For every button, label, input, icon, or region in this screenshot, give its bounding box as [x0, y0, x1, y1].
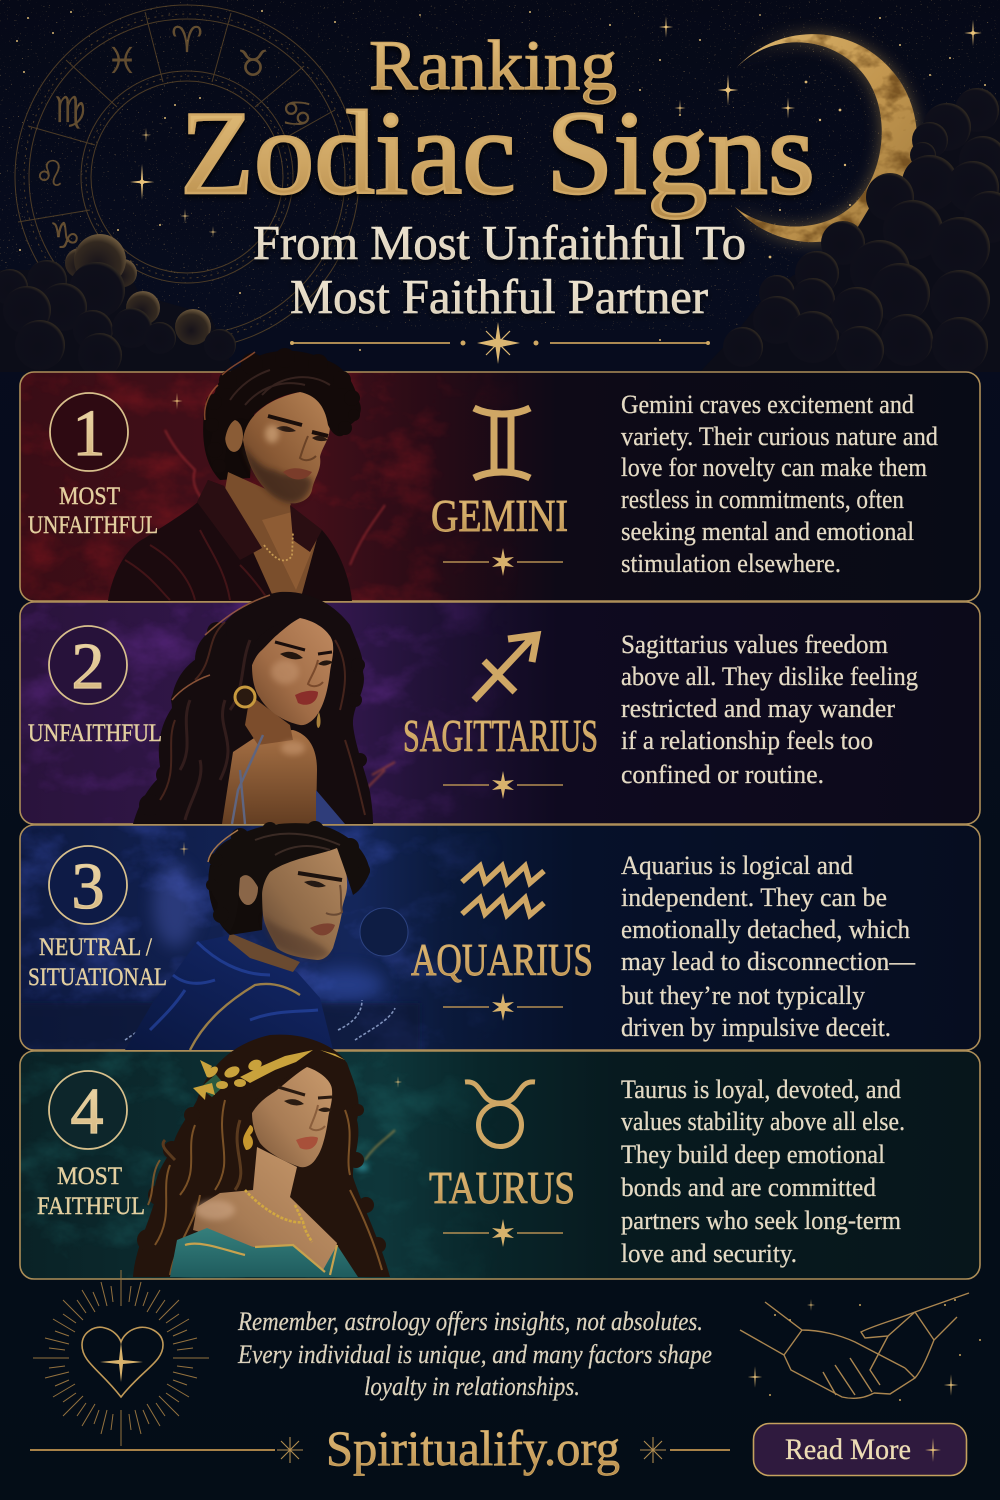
- description: seeking mental and emotional: [621, 517, 914, 546]
- description: Aquarius is logical and: [621, 851, 853, 880]
- description: [621, 851, 916, 1042]
- closing note: [237, 1307, 712, 1401]
- rank badge: 3: [72, 850, 104, 923]
- description: confined or routine.: [621, 760, 824, 789]
- nebula: [20, 602, 489, 823]
- description: Gemini craves excitement and: [621, 390, 914, 419]
- closing note: loyalty in relationships.: [364, 1372, 580, 1401]
- rank badge: [49, 1071, 127, 1149]
- sign name: SAGITTARIUS: [403, 711, 598, 761]
- title: Ranking: [369, 27, 617, 105]
- description: love for novelty can make them: [621, 453, 927, 482]
- description: They build deep emotional: [621, 1140, 885, 1169]
- title: [180, 27, 815, 324]
- description: emotionally detached, which: [621, 915, 910, 944]
- description: Taurus is loyal, devoted, and: [621, 1075, 901, 1104]
- rank label: MOST: [57, 1163, 122, 1190]
- portrait: woman with long dark hair: [133, 592, 373, 824]
- sign name: TAURUS: [429, 1163, 575, 1213]
- closing note: Every individual is unique, and many factors shape: [237, 1340, 712, 1369]
- read more button: [754, 1424, 966, 1476]
- title: Most Faithful Partner: [290, 269, 708, 324]
- starfield: [0, 0, 1000, 351]
- star divider: [443, 548, 563, 576]
- clouds left: [0, 234, 236, 377]
- portrait: man in blue cloak: [125, 821, 370, 1050]
- description: values stability above all else.: [621, 1107, 905, 1136]
- title divider: [290, 322, 710, 364]
- card border: [20, 1051, 980, 1279]
- icon: sagittarius: [474, 635, 537, 700]
- website footer: [30, 1420, 730, 1476]
- card background: [20, 1051, 980, 1279]
- rank label: FAITHFUL: [37, 1193, 145, 1220]
- description: restless in commitments, often: [621, 485, 904, 514]
- portrait: man in dark shirt: [108, 348, 361, 601]
- star divider: [443, 771, 563, 799]
- description: [621, 1075, 905, 1268]
- description: love and security.: [621, 1239, 797, 1268]
- rank badge: 4: [70, 1075, 104, 1148]
- rank badge: 2: [72, 630, 104, 703]
- card border: [20, 825, 980, 1050]
- sign name: AQUARIUS: [411, 935, 593, 985]
- icon: gemini: [474, 408, 530, 478]
- card background: [20, 372, 980, 601]
- zodiac wheel: ♓: [106, 41, 138, 82]
- nebula and sea: [20, 826, 480, 1050]
- description: may lead to disconnection—: [621, 947, 916, 976]
- zodiac wheel: ♉: [237, 44, 269, 85]
- panel: taurus: [20, 1035, 980, 1279]
- description: Sagittarius values freedom: [621, 630, 888, 659]
- zodiac wheel: [15, 5, 359, 349]
- portrait: woman with golden crown: [133, 1035, 390, 1277]
- star divider: [443, 1219, 563, 1247]
- star divider: [443, 993, 563, 1021]
- rank label: UNFAITHFUL: [28, 512, 158, 539]
- read more button: Read More: [785, 1433, 911, 1466]
- icon: taurus: [465, 1082, 535, 1146]
- description: independent. They can be: [621, 883, 887, 912]
- nebula: [20, 1052, 468, 1278]
- zodiac wheel: ♌: [34, 154, 66, 195]
- description: partners who seek long-term: [621, 1206, 901, 1235]
- description: [621, 630, 918, 789]
- rank label: SITUATIONAL: [28, 964, 167, 991]
- rank label: MOST: [59, 483, 120, 510]
- description: driven by impulsive deceit.: [621, 1013, 891, 1042]
- rank label: NEUTRAL /: [39, 934, 152, 961]
- description: stimulation elsewhere.: [621, 549, 841, 578]
- panel: sagittarius: [20, 592, 980, 824]
- card border: [20, 372, 980, 601]
- icon: clasped hands: [740, 1293, 981, 1401]
- sign name: GEMINI: [431, 491, 568, 541]
- rank label: UNFAITHFUL: [28, 720, 162, 747]
- panel: gemini: [20, 348, 980, 601]
- crescent moon: [730, 30, 925, 245]
- rank badge: [49, 846, 127, 924]
- icon: heart with rays: [33, 1270, 209, 1446]
- rank label: [37, 1163, 145, 1220]
- description: if a relationship feels too: [621, 726, 873, 755]
- description: [621, 390, 938, 578]
- zodiac wheel: ♑: [49, 216, 81, 257]
- clouds right: [700, 88, 1000, 374]
- zodiac wheel: ♋: [281, 94, 313, 135]
- rank badge: [49, 626, 127, 704]
- rank badge: [50, 393, 128, 471]
- nebula: [21, 372, 466, 600]
- card background: [20, 602, 980, 824]
- rank badge: 1: [72, 397, 106, 470]
- title: Zodiac Signs: [180, 86, 815, 219]
- description: restricted and may wander: [621, 694, 895, 723]
- zodiac wheel: ♍: [54, 90, 86, 131]
- card background: [20, 825, 980, 1050]
- icon: aquarius: [462, 866, 544, 915]
- zodiac wheel: ♈: [171, 20, 203, 61]
- description: but they’re not typically: [621, 981, 865, 1010]
- panel: aquarius: [20, 821, 980, 1063]
- description: bonds and are committed: [621, 1173, 876, 1202]
- description: variety. Their curious nature and: [621, 422, 938, 451]
- rank label: [28, 483, 158, 539]
- title: From Most Unfaithful To: [253, 215, 746, 270]
- card border: [20, 602, 980, 824]
- rank label: [28, 934, 167, 991]
- website footer: Spiritualify.org: [326, 1420, 620, 1476]
- description: above all. They dislike feeling: [621, 662, 918, 691]
- closing note: Remember, astrology offers insights, not absolutes.: [237, 1307, 703, 1336]
